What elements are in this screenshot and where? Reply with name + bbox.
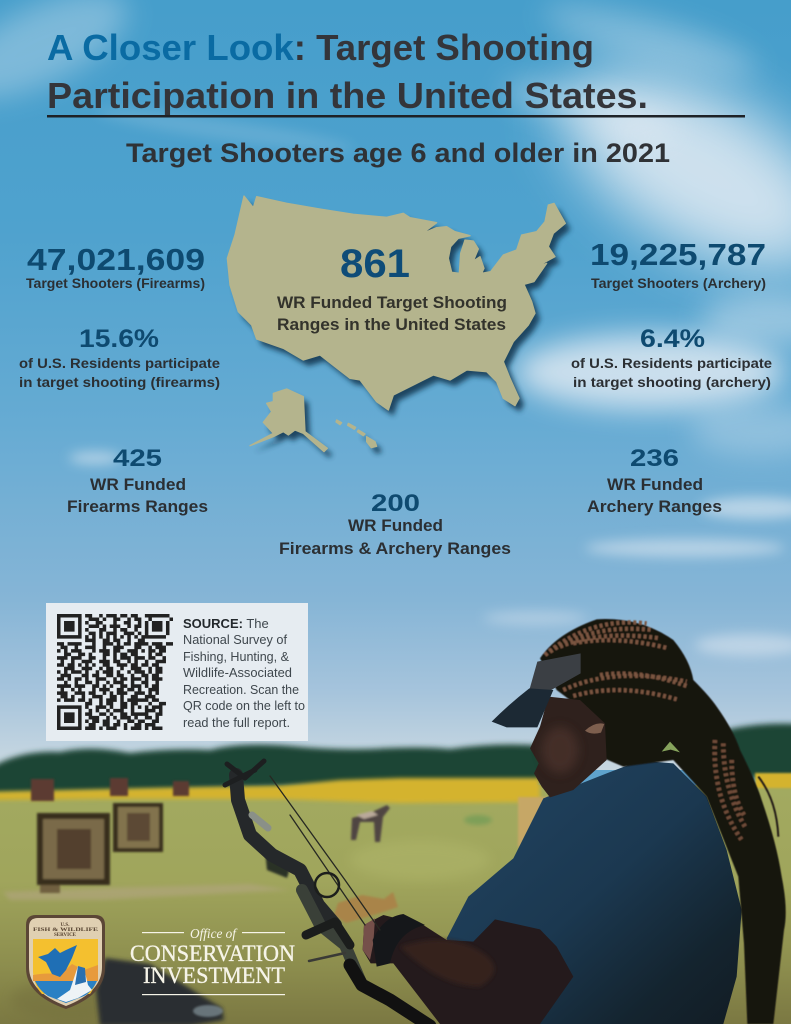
Alaska [250,389,327,452]
stat: combined ranges [279,490,511,558]
title: A Closer Look: Target Shooting [47,27,594,68]
source text: SOURCE: The [183,616,269,631]
source text: Fishing, Hunting, & [183,649,289,664]
stat: national ranges total: WR Funded Target Shooting [277,294,507,312]
stat: national ranges total: 861 [340,242,410,286]
background photo: field and treeline [0,724,791,1024]
logo: Office of Conservation Investment: Office of [190,927,238,942]
dark blurred foreground object [96,958,224,1024]
background photo: sky with clouds [0,0,791,770]
archer [363,619,786,1024]
face [530,697,607,797]
stat: firearms participation [19,325,221,390]
logo: U.S. Fish and Wildlife Service shield [26,915,105,1009]
stat: archery participation: 6.4% [640,325,705,353]
source text: Recreation. Scan the [183,682,299,697]
stat: firearms target shooters: Target Shooters (Firearms) [26,276,205,291]
source text: QR code on the left to [183,698,305,713]
stat: archery target shooters: 19,225,787 [590,237,766,272]
target: far [31,778,189,801]
stat: archery ranges [587,445,722,516]
post [518,797,564,847]
hair [540,619,786,1024]
stat: firearms participation: of U.S. Residents participate [19,356,221,371]
stat: firearms ranges: Firearms Ranges [67,497,208,516]
stat: firearms target shooters [26,242,205,291]
visor [492,653,581,727]
stat: archery target shooters [590,237,766,291]
source panel [46,603,308,741]
source text: read the full report. [183,715,290,730]
target: medium [113,803,163,852]
compound bow [225,761,430,1024]
stat: combined ranges: WR Funded [348,516,443,535]
stat: archery participation: in target shooting (archery) [573,375,771,390]
stat: archery participation: of U.S. Residents participate [571,356,773,371]
stat: combined ranges: 200 [371,490,420,517]
source text: National Survey of [183,632,287,647]
source text [183,616,305,730]
title: Participation in the United States. [47,75,648,116]
arm [363,915,573,1024]
wrist strap [373,914,425,967]
QR code [57,616,173,728]
logo: Office of Conservation Investment: CONSERVATION [130,941,295,966]
stat: archery ranges: 236 [630,445,679,472]
stat: firearms ranges: 425 [113,445,162,472]
stat: archery participation [571,325,773,390]
stat: national ranges total [277,242,507,334]
logo: U.S. Fish and Wildlife Service shield: U.S. [61,923,70,928]
logo: Office of Conservation Investment: INVESTMENT [143,963,285,988]
stat: firearms participation: 15.6% [79,325,159,353]
logo: U.S. Fish and Wildlife Service shield: FISH & WILDLIFE [33,928,99,933]
Hawaii [336,420,377,448]
title [47,27,648,116]
shirt [447,761,742,1024]
map of the United States [227,196,570,458]
deer target far [351,805,390,842]
logo: Office of Conservation Investment [130,927,295,995]
stat: archery ranges: Archery Ranges [587,497,722,516]
stat: firearms ranges: WR Funded [90,475,186,494]
stat: firearms target shooters: 47,021,609 [27,242,205,277]
stat: archery target shooters: Target Shooters (Archery) [591,276,766,291]
stat: combined ranges: Firearms & Archery Ranges [279,539,511,558]
target: large [37,813,110,893]
deer target near [334,892,398,923]
stat: firearms participation: in target shooting (firearms) [19,375,220,390]
subtitle: Target Shooters age 6 and older in 2021 [126,138,670,168]
stat: national ranges total: Ranges in the United States [277,316,506,334]
stat: firearms ranges [67,445,208,516]
logo: U.S. Fish and Wildlife Service shield: SERVICE [54,933,77,938]
source text: Wildlife-Associated [183,665,292,680]
stat: archery ranges: WR Funded [607,475,703,494]
